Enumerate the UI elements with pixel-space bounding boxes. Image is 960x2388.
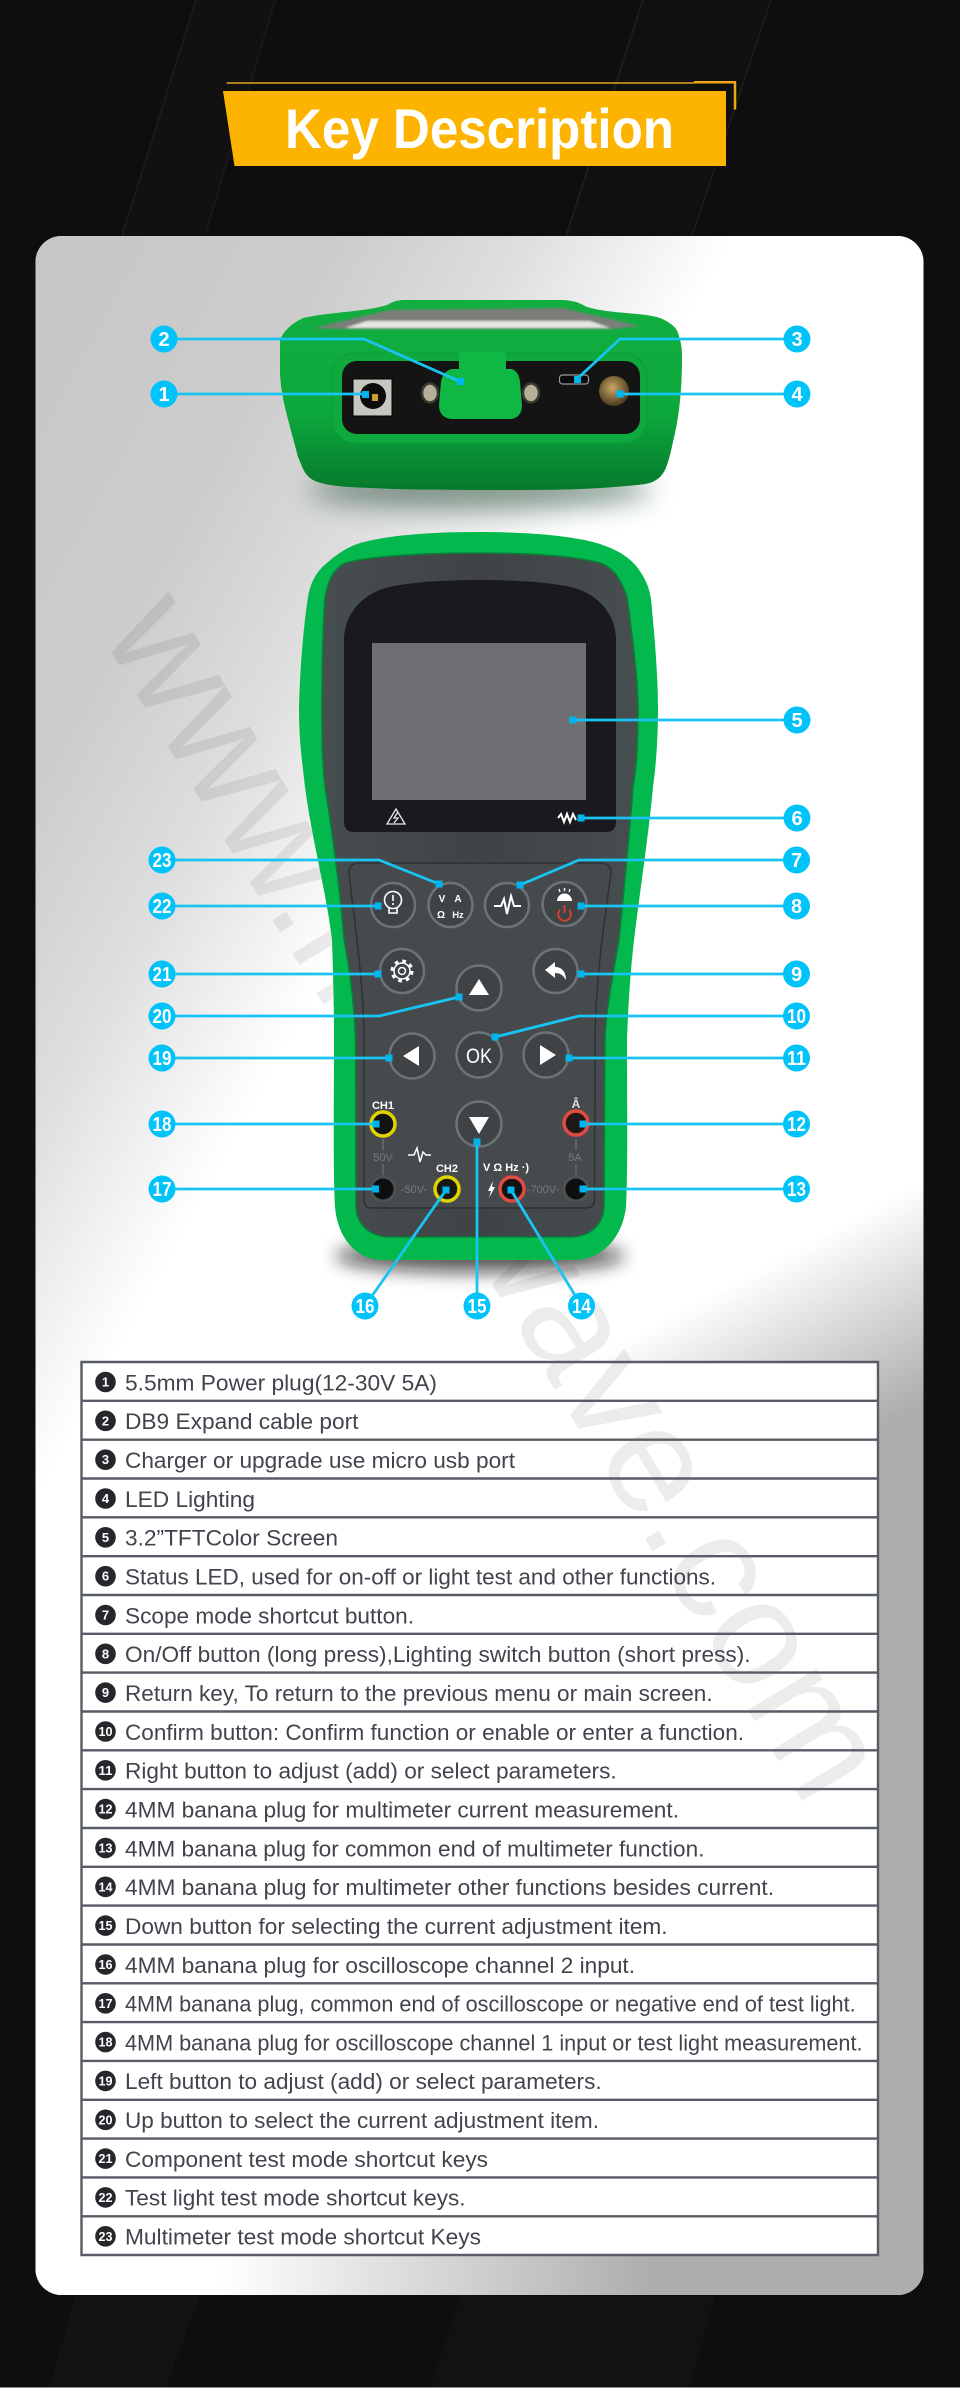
device: end view [280,300,682,510]
callout 3 [574,326,810,383]
button: test light [371,883,415,927]
button: component settings [380,949,424,993]
row 9: Return key, To return to the previous menu or main screen. [125,1681,713,1706]
jack: CH2: CH2 [436,1163,458,1175]
button: down [456,1102,502,1146]
jack range labels: -700V- [527,1184,560,1196]
jack range labels: 50V [373,1152,393,1164]
micro usb port [560,375,588,384]
row 3: 3 [102,1452,109,1467]
row 20: 20 [98,2112,112,2127]
callout 8 [578,892,810,920]
jack range labels [373,1139,582,1196]
screws [422,384,539,402]
button: ok [456,1032,502,1078]
callout 16: 16 [356,1296,374,1318]
port recess [342,361,640,434]
row 12: 4MM banana plug for multimeter current measurement. [125,1797,679,1822]
button: multimeter: V [439,894,446,905]
keypad panel [349,863,611,1208]
callout 10 [492,1002,810,1040]
callout 15 [464,1138,490,1320]
callout 2: 2 [158,329,170,351]
row 5: 3.2”TFTColor Screen [125,1526,338,1551]
row 18: 18 [98,2035,112,2050]
row 16: 4MM banana plug for oscilloscope channel 2 input. [125,1953,635,1978]
callout 15: 15 [468,1296,486,1318]
callout 21 [148,960,382,988]
callout 10: 10 [787,1006,806,1028]
callout 13 [580,1176,810,1202]
row 2: DB9 Expand cable port [125,1409,358,1434]
callouts [148,326,810,1320]
title banner: Key Description [285,97,674,160]
row 12: 12 [98,1802,112,1817]
row 5: 5 [102,1530,109,1545]
row 15: Down button for selecting the current adjustment item. [125,1914,668,1939]
jack: scope common [371,1177,395,1201]
button: ok: OK [466,1045,492,1068]
row 10: Confirm button: Confirm function or enable or enter a function. [125,1720,744,1745]
callout 4 [616,380,810,408]
row 22: 22 [98,2190,112,2205]
callout 3: 3 [791,329,803,351]
description table [82,1362,878,2255]
row 7: 7 [102,1608,109,1622]
row 13: 13 [98,1840,112,1856]
status squiggle icon [558,814,576,822]
jack: current [564,1096,588,1135]
led [599,376,629,406]
callout 19 [148,1044,392,1072]
row 1: 5.5mm Power plug(12-30V 5A) [125,1370,437,1395]
row 17: 17 [98,1996,112,2011]
button: multimeter [428,883,472,927]
callout 22 [148,892,382,920]
callout 2 [150,326,464,385]
callout 23 [148,846,442,888]
callout 23: 23 [152,850,172,872]
callout 7 [516,846,810,888]
row 1: 1 [102,1374,109,1390]
callout 12 [580,1110,810,1138]
scope icon [408,1148,431,1162]
callout 6: 6 [791,808,803,830]
callout 13: 13 [787,1179,806,1201]
row 18: 4MM banana plug for oscilloscope channel 1 input or test light measurement. [125,2030,862,2055]
row 19: 19 [98,2073,112,2088]
row 15: 15 [98,1918,112,1933]
main panel [36,236,924,2295]
row 16: 16 [98,1957,112,1972]
button: left [390,1034,434,1078]
row 11: Right button to adjust (add) or select parameters. [125,1759,617,1784]
row 23: Multimeter test mode shortcut Keys [125,2225,481,2250]
callout 22: 22 [152,896,172,918]
watermark [71,562,925,1826]
black screen bezel [344,580,616,832]
callout 20 [148,994,462,1030]
callout 9 [578,960,810,988]
callout 18: 18 [152,1114,172,1136]
row 21: 21 [98,2151,112,2166]
button: up [456,966,502,1010]
button: multimeter: A [454,894,462,905]
callout 21: 21 [152,964,172,986]
row 8: On/Off button (long press),Lighting switch button (short press). [125,1642,751,1667]
jack: multimeter input: V Ω Hz ·) [483,1162,529,1174]
button: scope [485,883,529,927]
callout 16 [352,1186,450,1320]
jack: multimeter common [564,1177,588,1201]
row 14: 14 [98,1879,113,1894]
callout 19: 19 [152,1048,172,1070]
button: multimeter: Ω [437,910,445,921]
callout 4: 4 [791,384,803,406]
title banner [223,82,735,166]
callout 8: 8 [791,896,802,918]
row 13: 4MM banana plug for common end of multimeter function. [125,1836,704,1861]
callout 5 [570,706,810,734]
callout 1 [150,380,369,408]
power jack [353,379,392,416]
callout 17 [148,1176,379,1202]
callout 14: 14 [572,1296,592,1318]
watermark: www.m [71,562,470,1070]
row 6: 6 [102,1569,109,1584]
row 10: 10 [98,1724,112,1739]
row 21: Component test mode shortcut keys [125,2147,488,2172]
row 3: Charger or upgrade use micro usb port [125,1448,515,1473]
top of case with keypad and screen edge [313,308,640,329]
callout 12: 12 [787,1114,806,1136]
jack: multimeter input [483,1162,529,1201]
row 11: 11 [98,1763,112,1778]
callout 18 [148,1110,380,1138]
warning triangle icon [387,809,405,824]
callout 11 [566,1044,810,1072]
row 4: 4 [102,1491,110,1506]
DB9 rubber plug [439,352,522,419]
row 22: Test light test mode shortcut keys. [125,2186,466,2211]
button: return [534,949,578,993]
callout 1: 1 [158,384,170,406]
row 14: 4MM banana plug for multimeter other functions besides current. [125,1875,774,1900]
button: multimeter: Hz [452,910,464,921]
callout 9: 9 [791,964,802,986]
row 17: 4MM banana plug, common end of oscilloscope or negative end of test light. [125,1992,856,2017]
jack: CH1: CH1 [372,1100,394,1112]
device: front view [299,532,658,1272]
jack: CH1 [371,1100,395,1136]
row 7: Scope mode shortcut button. [125,1603,414,1628]
row 6: Status LED, used for on-off or light test and other functions. [125,1564,716,1590]
jack range labels: 5A [568,1152,582,1164]
screen [372,643,586,800]
jack: current: Â [572,1096,581,1111]
watermark: wave.com [426,1152,925,1826]
grey body [322,553,638,1237]
button: right [524,1032,568,1078]
callout 11: 11 [787,1048,806,1070]
jack range labels: -50V- [401,1184,427,1196]
callout 14 [508,1186,595,1320]
callout 5: 5 [791,710,803,732]
row 23: 23 [98,2229,112,2244]
row 2: 2 [102,1413,109,1428]
row 19: Left button to adjust (add) or select parameters. [125,2069,602,2094]
callout 17: 17 [152,1179,172,1201]
callout 6 [578,804,810,832]
button: power and light [542,882,586,926]
callout 7: 7 [791,850,802,872]
row 9: 9 [102,1685,109,1700]
jack: CH2 [435,1163,459,1201]
callout 20: 20 [152,1006,172,1028]
row 8: 8 [102,1646,109,1661]
row 20: Up button to select the current adjustment item. [125,2108,599,2133]
row 4: LED Lighting [125,1487,255,1512]
table background [82,1362,878,2255]
green rubber case [299,532,658,1260]
